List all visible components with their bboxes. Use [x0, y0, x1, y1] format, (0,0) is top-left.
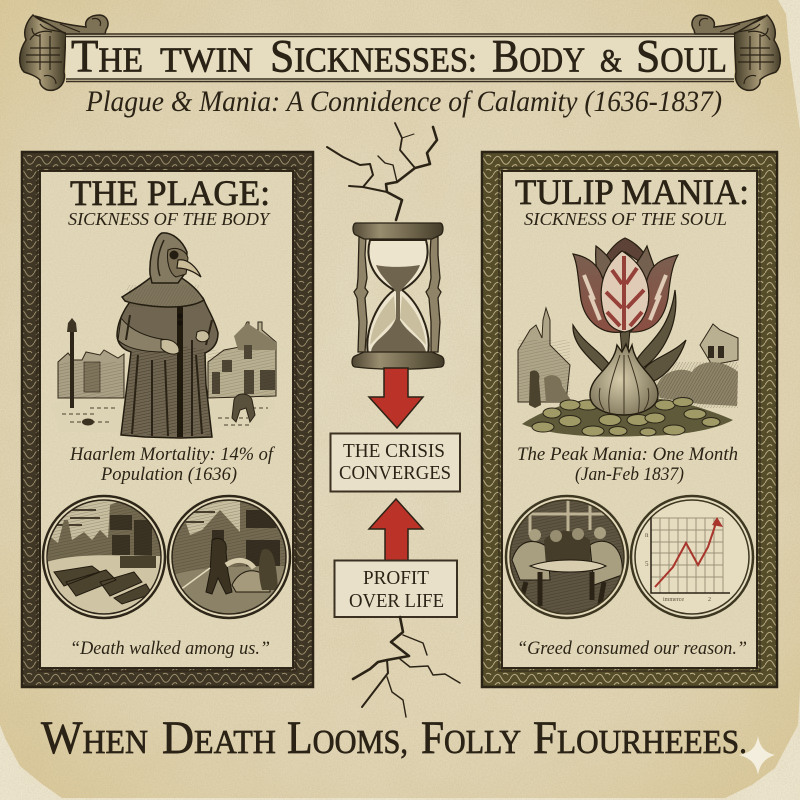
- hourglass lower glass tint: [370, 296, 426, 345]
- arrow: up: [369, 499, 423, 561]
- hourglass glass: [367, 240, 429, 354]
- banner scroll: left: [20, 15, 108, 90]
- box: the crisis converges: CONVERGES: [339, 462, 451, 484]
- subheading: sickness of the soul: SICKNESS OF THE SOUL: [524, 209, 727, 229]
- illustration: village and crowd: [518, 308, 738, 408]
- hourglass plates: [352, 223, 444, 369]
- hourglass sand: [371, 265, 426, 352]
- doctor mask and beak: [167, 248, 201, 277]
- subtitle: Plague & Mania: A Connidence of Calamity (1636-1837): [85, 85, 722, 118]
- hourglass pillars: [354, 237, 441, 352]
- statistic: peak mania: (Jan-Feb 1837): [575, 464, 684, 485]
- closing tagline: FOLLY: [421, 712, 521, 764]
- chart labels: n: [645, 531, 649, 539]
- chart price line: [655, 520, 717, 587]
- box: the crisis converges: THE CRISIS: [343, 440, 445, 462]
- panel: tulip mania: [482, 152, 777, 687]
- statistic: haarlem mortality: Population (1636): [100, 464, 237, 485]
- banner ribbon: [66, 34, 734, 82]
- heading: the plage: THE PLAGE:: [70, 173, 270, 213]
- chart axes: [651, 517, 730, 593]
- statistic: peak mania: [517, 444, 738, 485]
- crack: upper: [327, 123, 437, 220]
- panel: the plague: [22, 152, 313, 687]
- tulip stem: [620, 330, 630, 352]
- banner scroll: right: [692, 15, 780, 90]
- box: profit over life: PROFIT: [363, 567, 429, 589]
- panel frame: tulip: [482, 152, 777, 687]
- arrow: down: [369, 368, 423, 428]
- statistic: haarlem mortality: Haarlem Mortality: 14% of: [69, 444, 276, 465]
- tulip coins: [522, 398, 733, 437]
- doctor hood: [150, 233, 187, 283]
- quote: death walked among us: “Death walked among us.”: [70, 638, 270, 659]
- title: &: [600, 44, 622, 80]
- subheading: sickness of the body: SICKNESS OF THE BODY: [68, 209, 271, 229]
- chart labels: 5: [645, 560, 649, 568]
- title: [71, 30, 727, 82]
- closing tagline: LOOMS,: [287, 712, 408, 764]
- title: TWIN: [160, 40, 253, 80]
- title: SICKNESSES:: [270, 30, 477, 82]
- title banner: [20, 15, 780, 90]
- central column: [327, 123, 460, 717]
- heading: tulip mania: TULIP MANIA:: [515, 172, 749, 212]
- statistic: peak mania: The Peak Mania: One Month: [517, 444, 738, 465]
- closing tagline: [41, 712, 747, 764]
- box: profit over life: OVER LIFE: [349, 590, 444, 612]
- doctor hands and buttons: [161, 314, 209, 354]
- medallion: tavern traders: [506, 496, 628, 618]
- medallion: coffins in the street: [43, 496, 166, 620]
- tulip flower: [573, 238, 678, 332]
- icon: sparkle: [739, 736, 775, 775]
- box: profit over life: [334, 560, 457, 617]
- statistic: haarlem mortality: [69, 444, 276, 485]
- closing tagline: FLOURHEEES.: [533, 712, 747, 764]
- tulip leaves: [573, 290, 686, 382]
- tulip bulb: [590, 344, 658, 415]
- box: the crisis converges: [330, 434, 460, 492]
- closing tagline: DEATH: [162, 712, 276, 764]
- doctor cape: [122, 277, 204, 307]
- title: BODY: [492, 30, 585, 82]
- chart labels: 2: [708, 597, 711, 603]
- medallion: price chart: [631, 496, 753, 618]
- illustration: tulip and bulb on coins: [522, 238, 733, 437]
- chart labels: immerce: [663, 597, 684, 603]
- closing tagline: WHEN: [41, 712, 148, 764]
- icon: hourglass: [352, 223, 444, 369]
- illustration: plague doctor: [117, 233, 218, 438]
- title: SOUL: [636, 30, 727, 82]
- panel frame: plague: [22, 152, 313, 687]
- crack: lower: [353, 617, 460, 717]
- medallion: plague victims and carrier: [168, 496, 290, 620]
- title: THE: [71, 30, 143, 82]
- chart grid: [651, 518, 723, 593]
- illustration: town behind the doctor: [50, 318, 276, 432]
- chart labels: [645, 531, 711, 603]
- chart arrowhead: [712, 517, 723, 527]
- quote: greed consumed our reason: “Greed consumed our reason.”: [517, 638, 747, 659]
- doctor robe: [117, 280, 218, 438]
